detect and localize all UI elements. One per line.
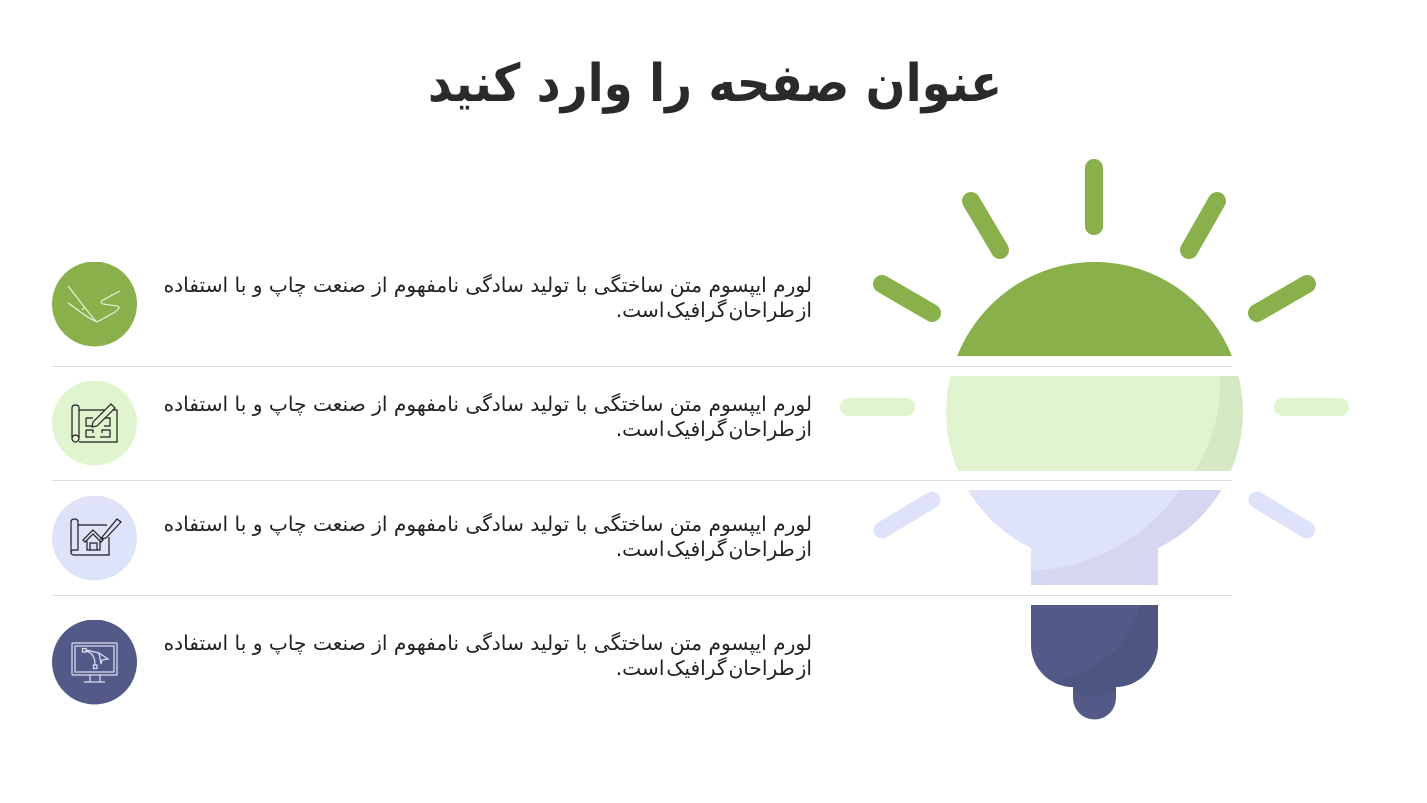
lavender rays — [882, 500, 1307, 530]
row 3 text: لورم ایپسوم متن ساختگی با تولید سادگی نامفهوم از صنعت چاپ و با استفاده — [164, 512, 812, 536]
green rays — [882, 168, 1307, 313]
row 1 text: از طراحان گرافیک است. — [616, 298, 812, 322]
row 3 text: از طراحان گرافیک است. — [616, 537, 812, 561]
row 2 icon: floor plan — [52, 381, 137, 466]
bulb green section — [957, 262, 1232, 356]
bulb lavender section — [968, 490, 1222, 585]
light bulb illustration — [840, 159, 1349, 720]
row 2 text: از طراحان گرافیک است. — [616, 417, 812, 441]
light green rays — [849, 398, 1340, 416]
row 4 text: لورم ایپسوم متن ساختگی با تولید سادگی نامفهوم از صنعت چاپ و با استفاده — [164, 631, 812, 655]
bulb base — [1031, 605, 1160, 720]
row 1 text — [164, 273, 812, 322]
row 4 icon: monitor with vector curve — [52, 620, 137, 704]
row 3 text — [164, 512, 812, 561]
bulb light green section — [930, 376, 1260, 471]
row 3 icon: house plan — [52, 496, 137, 580]
row 2 text: لورم ایپسوم متن ساختگی با تولید سادگی نامفهوم از صنعت چاپ و با استفاده — [164, 392, 812, 416]
row 4 text: از طراحان گرافیک است. — [616, 656, 812, 680]
row 1 text: لورم ایپسوم متن ساختگی با تولید سادگی نامفهوم از صنعت چاپ و با استفاده — [164, 273, 812, 297]
row 2 text — [164, 392, 812, 441]
row 4 text — [164, 631, 812, 680]
divider lines — [52, 366, 1232, 367]
title: عنوان صفحه را وارد کنید — [428, 54, 1002, 114]
row 1 icon: pen signature — [52, 262, 137, 346]
